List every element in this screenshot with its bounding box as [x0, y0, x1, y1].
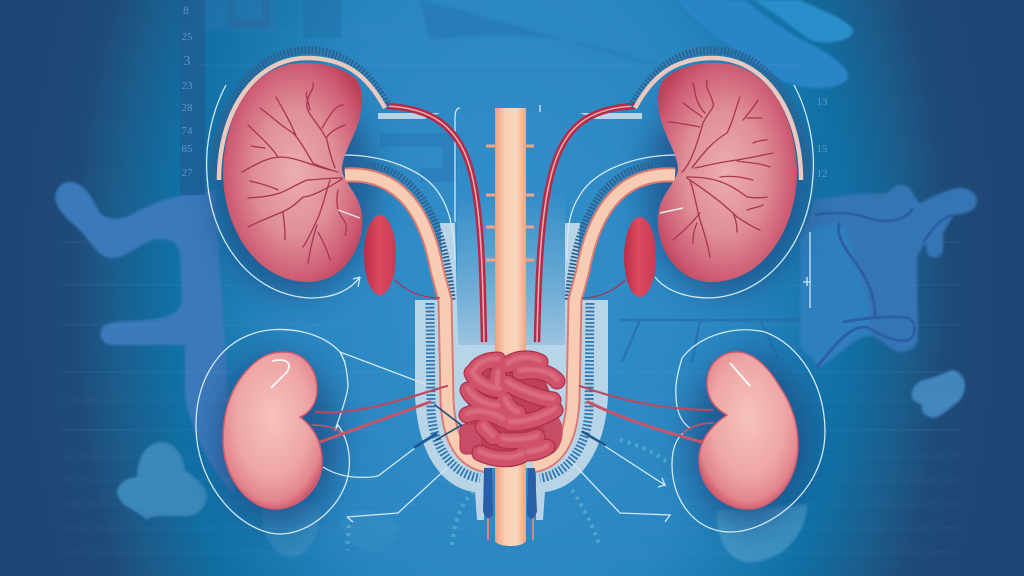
- right blob lighter portion: [800, 225, 872, 367]
- scale numbers right: 12: [816, 168, 828, 180]
- scale numbers left: 28: [182, 102, 193, 114]
- right adrenal gland: [582, 208, 683, 298]
- right ureter tube: [533, 165, 675, 478]
- scale numbers left: 74: [182, 125, 193, 137]
- scale numbers left: [182, 3, 193, 179]
- capsule ticks: [213, 50, 389, 180]
- lower tube ticks: [540, 303, 590, 478]
- capsule band: [219, 58, 385, 180]
- scale numbers left: 3: [184, 54, 190, 69]
- left adrenal gland: [338, 210, 440, 298]
- tube ticks: [367, 165, 452, 300]
- lower vessels: [312, 386, 713, 447]
- right blob: [800, 185, 977, 367]
- upper left kidney: [213, 50, 389, 282]
- capsule ticks: [631, 50, 807, 180]
- kidney body: [658, 63, 797, 282]
- column: [495, 108, 526, 546]
- scale numbers left: 8: [183, 3, 189, 17]
- scale numbers left: 23: [182, 80, 193, 92]
- kidney body: [223, 63, 362, 282]
- lower left blob: [117, 442, 207, 519]
- scale numbers left: 85: [182, 143, 193, 155]
- highlight: [271, 360, 289, 388]
- lower right kidney: [699, 352, 798, 509]
- scale numbers right: 15: [816, 143, 828, 155]
- tube ticks: [568, 165, 653, 300]
- dotted traces: [347, 440, 670, 550]
- tube: [345, 175, 487, 466]
- left artery: [387, 106, 484, 342]
- tube: [533, 175, 675, 466]
- left blob: [55, 182, 235, 495]
- lower left kidney: [223, 352, 322, 509]
- grid lines: [60, 32, 960, 552]
- left ureter tube: [345, 165, 487, 478]
- scale numbers right: 13: [816, 96, 828, 108]
- light panels beside column: [457, 190, 495, 345]
- right artery: [537, 106, 635, 342]
- veins: [668, 80, 773, 257]
- scale numbers left: 25: [182, 31, 193, 43]
- central column: [486, 108, 534, 546]
- kidney glow shadows: [215, 85, 812, 525]
- scale numbers right: [816, 96, 828, 180]
- right small blob: [912, 370, 965, 418]
- outlines around upper kidneys and lower kidneys: [196, 85, 825, 534]
- scale numbers left: 27: [182, 167, 193, 179]
- lower tube ticks: [430, 303, 480, 478]
- column rungs: [486, 146, 534, 260]
- dark anatomical curves right: [815, 208, 953, 367]
- upper right kidney: [631, 50, 807, 282]
- veins: [242, 83, 346, 263]
- blue vessels at base of column: [483, 468, 537, 540]
- top blobs: [677, 0, 848, 88]
- pale guide bands: [378, 113, 642, 520]
- highlight: [730, 363, 750, 386]
- capsule band: [635, 58, 801, 180]
- intestines: [460, 357, 557, 459]
